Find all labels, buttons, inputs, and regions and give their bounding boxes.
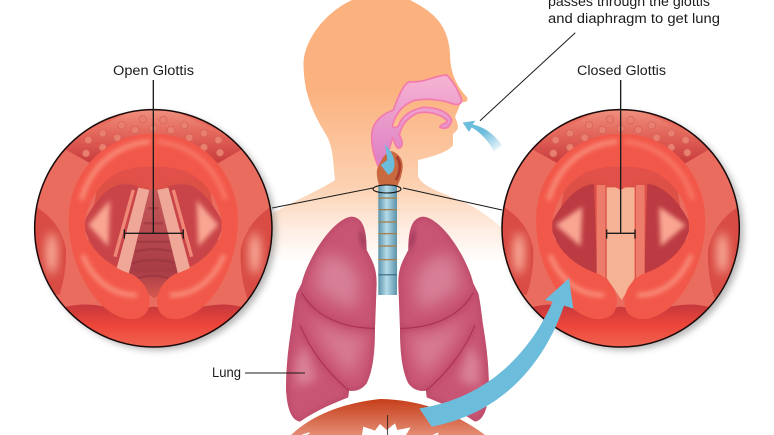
lung pointer line <box>245 372 305 374</box>
closed glottis folds <box>551 165 691 300</box>
connector line to open glottis <box>272 188 373 208</box>
panel: open glottis circle <box>30 80 277 357</box>
right lung <box>398 217 489 422</box>
large blue arrow from diaphragm to closed glottis <box>419 278 573 427</box>
windpipe marker ellipse <box>373 185 401 193</box>
pointer line from breath arrow to caption <box>480 33 575 121</box>
open glottis pointer <box>124 80 183 239</box>
panel: closed glottis circle <box>497 80 744 357</box>
label: lung: Lung <box>212 365 241 380</box>
connector line to closed glottis <box>403 188 502 210</box>
caption: airflow description <box>548 0 720 26</box>
head and shoulders silhouette <box>245 0 540 262</box>
breath arrow entering the mouth <box>463 121 502 151</box>
diaphragm <box>288 398 488 435</box>
trachea <box>378 185 397 295</box>
label: closed glottis: Closed Glottis <box>577 63 666 78</box>
airway: nasal and oral cavity <box>372 75 462 170</box>
caption: airflow description: and diaphragm to get lung <box>548 11 720 26</box>
larynx <box>377 144 403 186</box>
left lung <box>286 217 377 422</box>
open glottis folds <box>83 165 223 298</box>
label: open glottis: Open Glottis <box>113 63 194 78</box>
closed glottis pointer <box>607 80 635 239</box>
